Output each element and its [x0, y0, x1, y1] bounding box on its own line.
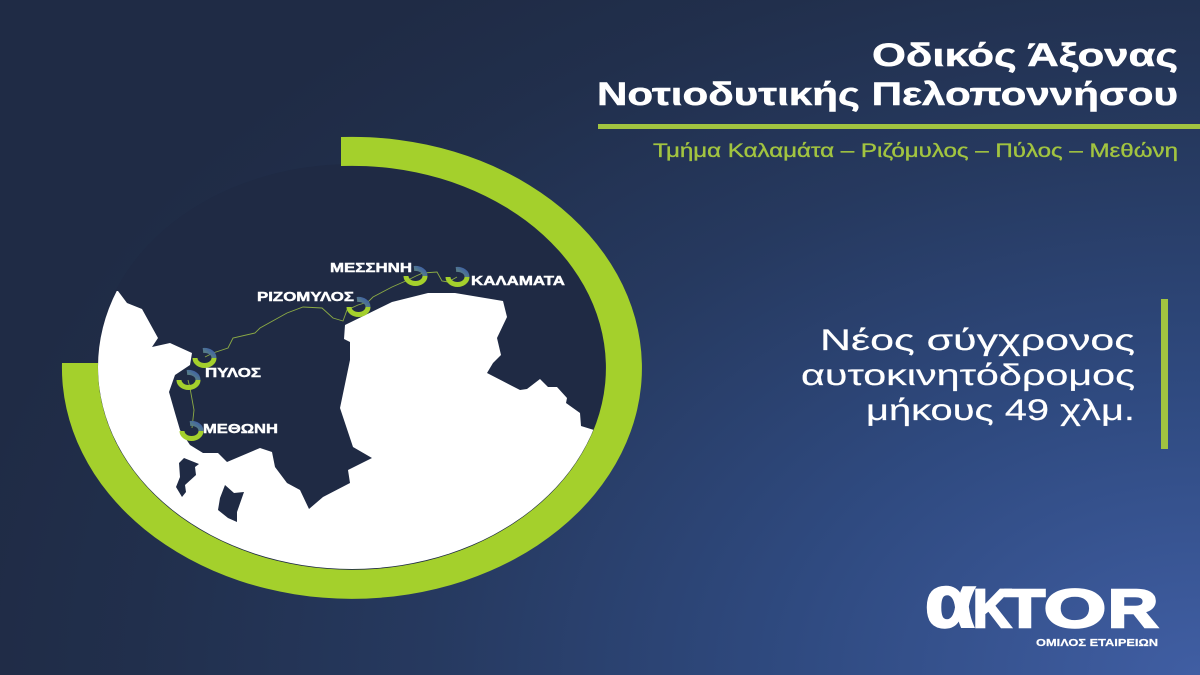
map sea area — [98, 291, 594, 569]
description line 3: μήκους 49 χλμ. — [866, 394, 1135, 427]
marker: Μεσσήνη — [406, 268, 425, 284]
logo wordmark: O — [1044, 579, 1106, 639]
road route line — [188, 272, 457, 428]
logo wordmark: R — [1108, 579, 1158, 639]
marker: Ριζόμυλος — [349, 299, 368, 314]
island: Schiza — [218, 485, 244, 522]
label: ΜΕΘΩΝΗ: ΜΕΘΩΝΗ — [203, 422, 278, 436]
island: Sapientza — [176, 458, 199, 497]
map: Peloponnese in a circular frame — [98, 175, 606, 570]
logo wordmark: α — [925, 560, 975, 643]
marker: Πύλος — [195, 350, 214, 366]
marker: Μεθώνη — [182, 423, 201, 439]
description line 1: Νέος σύγχρονος — [820, 324, 1135, 357]
label: ΚΑΛΑΜΑΤΑ: ΚΑΛΑΜΑΤΑ — [471, 274, 565, 288]
title line 1: Οδικός Άξονας — [872, 37, 1178, 73]
vertical accent bar — [1161, 299, 1168, 449]
label: ΡΙΖΟΜΥΛΟΣ: ΡΙΖΟΜΥΛΟΣ — [257, 290, 355, 304]
label: ΜΕΣΣΗΝΗ: ΜΕΣΣΗΝΗ — [330, 261, 412, 275]
green ring arc — [62, 137, 642, 599]
title — [597, 37, 1178, 112]
map land background — [97, 164, 607, 570]
logo: AKTOR — [925, 560, 1158, 649]
logo tagline: ΟΜΙΛΟΣ ΕΤΑΙΡΕΙΩΝ — [1036, 637, 1158, 649]
title underline — [598, 124, 1200, 129]
label: ΠΥΛΟΣ: ΠΥΛΟΣ — [205, 366, 262, 380]
description line 2: αυτοκινητόδρομος — [801, 359, 1135, 392]
logo wordmark: K — [973, 579, 1011, 639]
logo wordmark: T — [1005, 579, 1045, 639]
subtitle: Τμήμα Καλαμάτα – Ριζόμυλος – Πύλος – Μεθώνη — [653, 141, 1178, 162]
marker: Πύλος south — [179, 372, 198, 388]
title line 2: Νοτιοδυτικής Πελοποννήσου — [597, 76, 1178, 112]
description text — [801, 324, 1135, 427]
marker: Καλαμάτα — [448, 269, 467, 284]
logo wordmark — [925, 560, 1158, 643]
